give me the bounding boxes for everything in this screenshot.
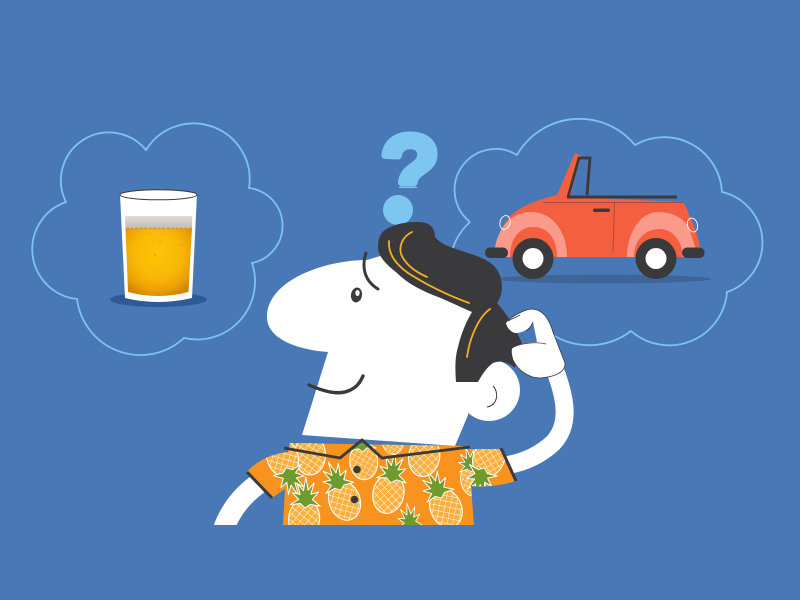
car body [494, 153, 701, 257]
left cuff [247, 472, 272, 498]
beer liquid [126, 228, 192, 296]
car shadow [497, 274, 711, 284]
right arm [508, 365, 565, 465]
pineapple pattern [266, 443, 505, 525]
beer glass [110, 190, 207, 307]
beer bubbles [132, 237, 188, 276]
thought cloud: left [32, 123, 283, 355]
question mark dot [383, 195, 413, 225]
shirt [246, 438, 518, 525]
hand [506, 309, 565, 378]
hand outline [508, 309, 565, 378]
left arm [221, 484, 258, 537]
buttons [353, 466, 361, 473]
folded roof [567, 196, 677, 198]
eyebrow [364, 253, 378, 289]
glass shadow [110, 292, 207, 307]
headlights [498, 214, 512, 231]
bumpers [485, 248, 508, 258]
head and neck [267, 250, 476, 446]
thought cloud: right [453, 119, 762, 345]
question mark: ? [380, 115, 440, 224]
shirt fabric [247, 443, 516, 525]
eye [350, 287, 363, 303]
inner ear [487, 386, 497, 407]
beer foam [125, 216, 192, 229]
right cuff [501, 448, 516, 481]
windshield frame [568, 158, 590, 197]
glass body [120, 194, 197, 302]
front fender [494, 212, 567, 257]
head [267, 222, 522, 446]
hair highlights [389, 232, 490, 357]
collar [284, 440, 470, 458]
body crease lines [543, 202, 683, 252]
wheels [512, 238, 554, 279]
hair [378, 222, 522, 382]
hand shape [506, 309, 565, 378]
door handle [593, 208, 610, 212]
foam edge [126, 228, 192, 230]
illustration: man choosing between a beer and a car [31, 118, 764, 525]
rear fender [627, 212, 696, 257]
ear [458, 359, 520, 421]
smile [309, 376, 363, 393]
glass rim [120, 190, 197, 200]
car [485, 153, 711, 284]
